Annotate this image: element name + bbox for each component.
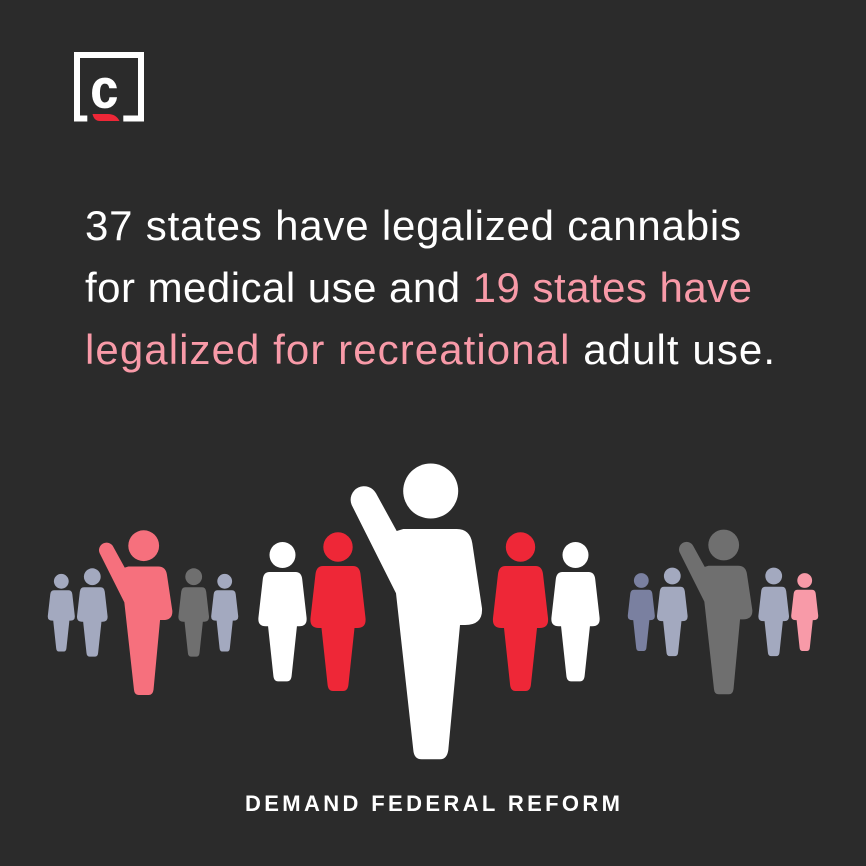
person: lavender inner left: [211, 574, 238, 652]
headline line 1: 37 states have legalized cannabis: [85, 202, 741, 249]
logo: [74, 52, 144, 122]
person: red left: [310, 532, 366, 691]
person: lavender right: [657, 568, 688, 656]
person: lavender left: [77, 568, 108, 657]
crowd of people: [48, 464, 818, 759]
logo letter: c: [90, 59, 118, 120]
person: red right: [493, 532, 548, 691]
person: lavender inner right: [758, 568, 789, 656]
person: gray left: [178, 568, 209, 657]
person: light pink: [791, 573, 818, 651]
person: white right: [551, 542, 600, 681]
footer call to action: DEMAND FEDERAL REFORM: [245, 791, 620, 816]
headline line 2: for medical use and 19 states have: [85, 264, 752, 311]
headline line 3: legalized for recreational adult use.: [85, 326, 775, 373]
person: pink raised hand: [99, 530, 172, 695]
person: slate: [628, 573, 655, 651]
person: lavender far left: [48, 574, 75, 652]
logo red swoosh: [92, 114, 120, 121]
person: white center raised hand: [351, 464, 482, 759]
headline: [85, 202, 775, 373]
person: white left: [258, 542, 307, 681]
logo bracket: [74, 52, 144, 122]
person: gray raised hand: [679, 530, 752, 694]
